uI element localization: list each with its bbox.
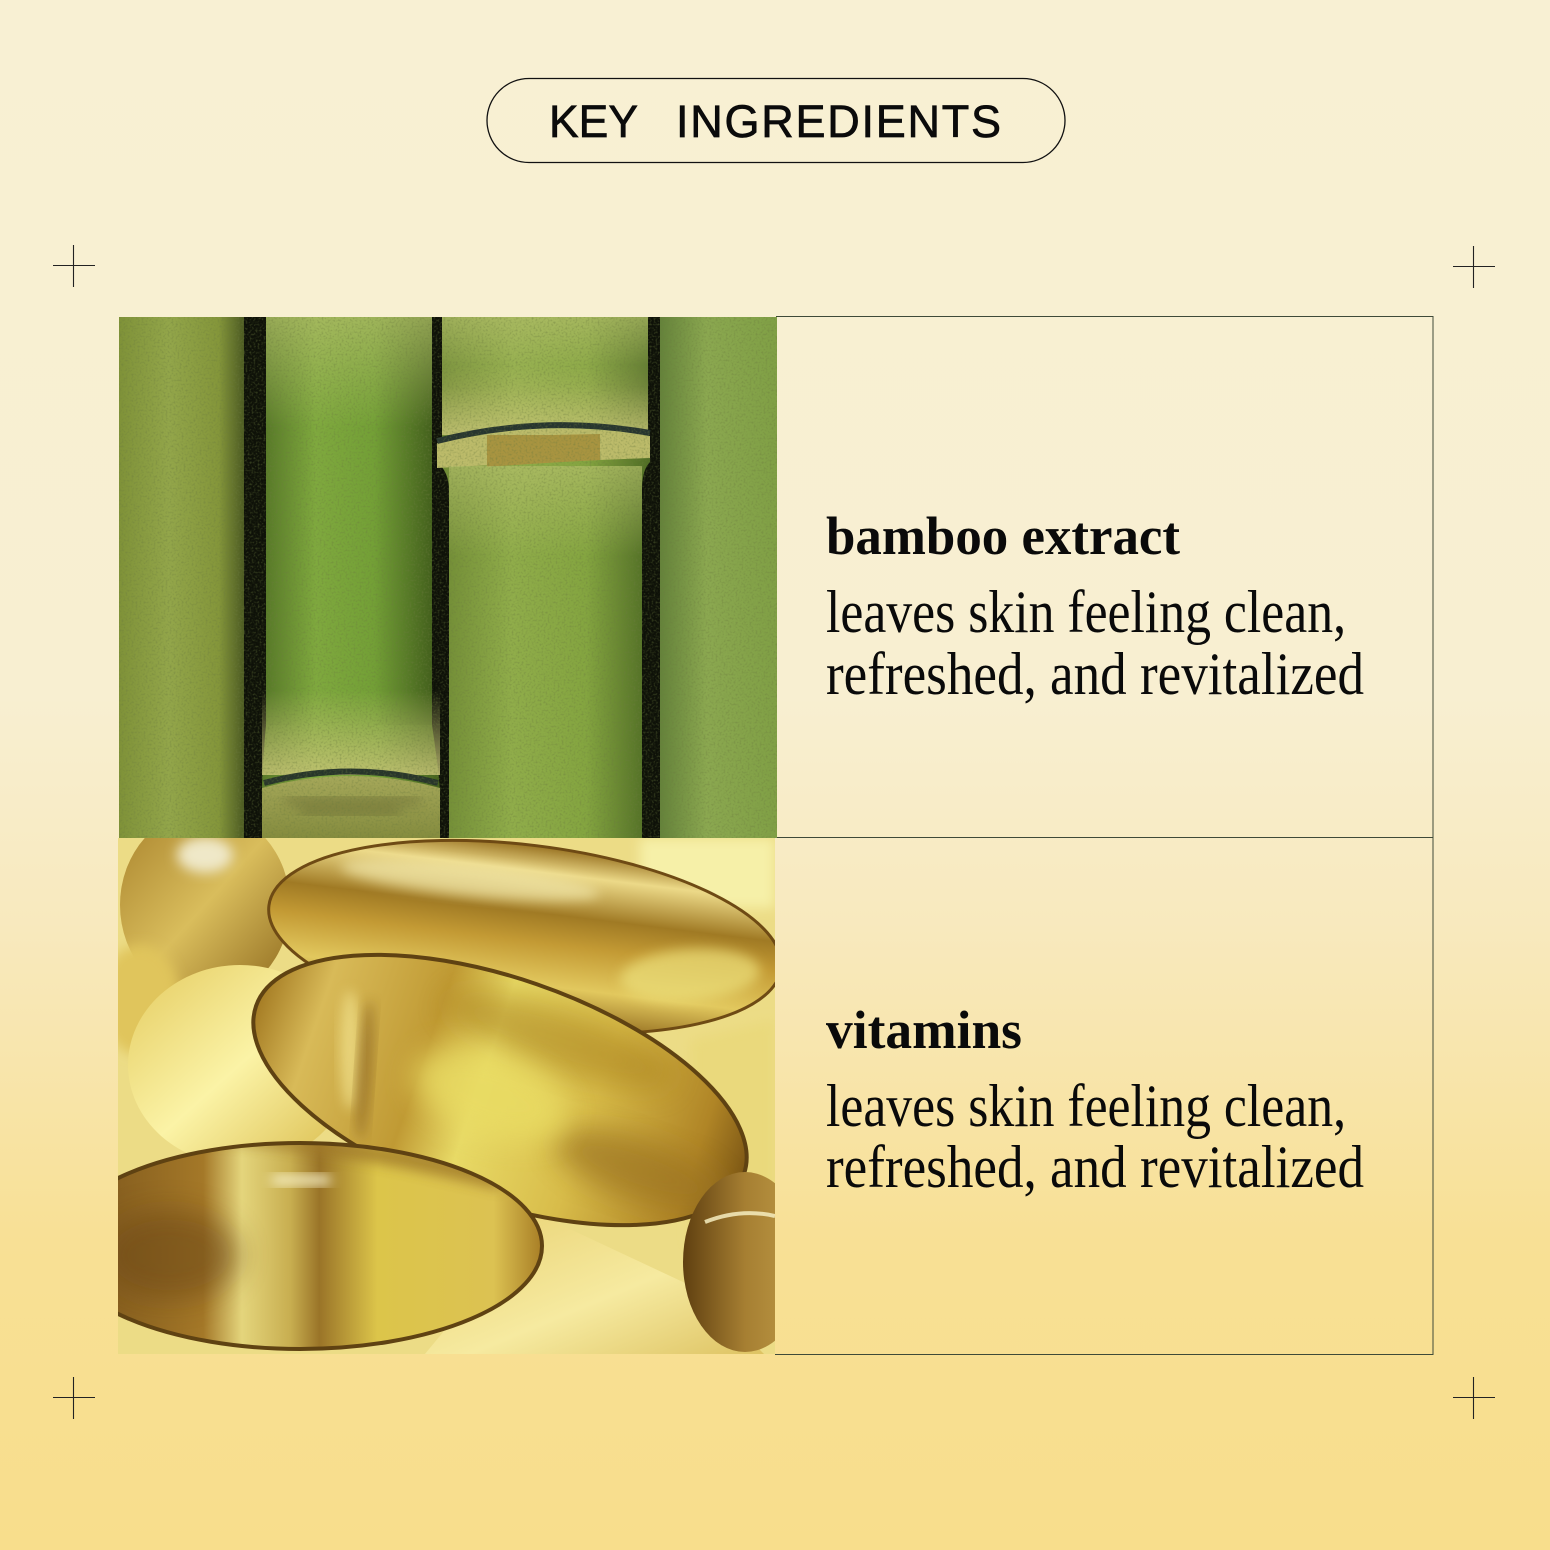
corner marker: top left <box>53 245 95 287</box>
capsule: center <box>251 952 749 1228</box>
capsule: top <box>267 838 775 1033</box>
capsule: right back <box>694 1028 770 1180</box>
title pill: key ingredients <box>487 78 1065 162</box>
capsule: right edge <box>683 1172 775 1352</box>
bamboo stalk 4 <box>660 317 777 838</box>
heading: vitamins: vitamins <box>826 1000 1022 1060</box>
corner marker: top right <box>1453 246 1495 288</box>
title pill: key ingredients: KEY <box>549 96 638 147</box>
capsule: back left <box>120 838 286 985</box>
description: bamboo extract <box>826 579 1364 707</box>
corner marker: bottom left <box>53 1377 95 1419</box>
description: bamboo extract: leaves skin feeling clean, <box>826 579 1346 645</box>
capsule: bottom light <box>425 1242 764 1354</box>
ingredient block: bamboo extract <box>826 506 1364 707</box>
description: bamboo extract: refreshed, and revitalized <box>826 641 1364 707</box>
capsule: left light <box>129 965 326 1153</box>
ingredient block: vitamins <box>826 1000 1364 1200</box>
image: vitamin capsules <box>118 838 775 1354</box>
capsule: bottom left <box>118 1141 544 1351</box>
bamboo stalk 3 <box>437 317 650 838</box>
bamboo stalk 2 <box>262 317 440 838</box>
bamboo stalk 1 <box>119 317 244 838</box>
description: vitamins: refreshed, and revitalized <box>826 1134 1364 1200</box>
description: vitamins: leaves skin feeling clean, <box>826 1073 1346 1139</box>
title pill: key ingredients: INGREDIENTS <box>676 96 1001 147</box>
image: bamboo stalks <box>119 317 777 838</box>
description: vitamins <box>826 1073 1364 1200</box>
heading: bamboo extract: bamboo extract <box>826 506 1180 566</box>
corner marker: bottom right <box>1453 1377 1495 1419</box>
bamboo speckle texture <box>119 317 777 838</box>
panel: ingredient text frame <box>775 316 1433 1354</box>
